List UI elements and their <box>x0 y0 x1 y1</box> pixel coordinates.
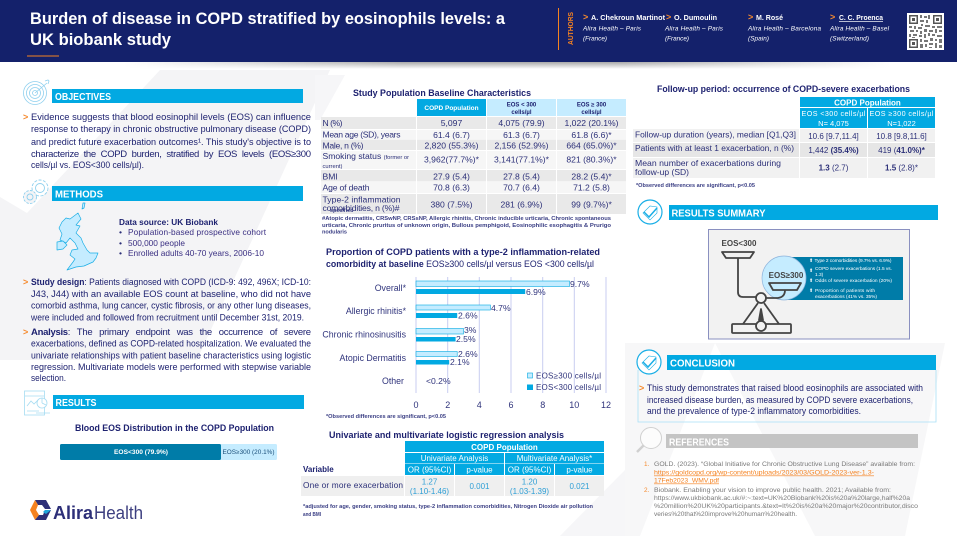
table: logistic regression: Variable <box>303 465 334 474</box>
author 3: (Spain) <box>748 36 769 42</box>
bar chart: type-2 comorbidity: 2.1% <box>450 357 470 367</box>
table: baseline characteristics <box>321 88 626 236</box>
author 4: C. C. Proenca <box>839 15 883 22</box>
table: follow-up exacerbations: 1.5 (2.8)* <box>885 164 918 172</box>
table: logistic regression: Multivariate Analysis* <box>517 454 592 463</box>
data source block: Population-based prospective cohort <box>128 227 267 237</box>
text block: references: 17Feb2023_WMV.pdf <box>654 478 719 484</box>
table: follow-up exacerbations: 419 (41.0%)* <box>878 146 926 155</box>
text block: study design: comorbid asthma, lung cancer, cystic fibrosis, or any other lung diseases, <box>31 300 311 312</box>
text block: analysis: regression. Multivariate models were performed with stepwise variable <box>31 362 311 373</box>
author 1 <box>582 12 666 42</box>
footnote: follow-up table: *Observed differences are significant, p<0.05 <box>636 183 755 189</box>
footnote: baseline table: urticaria, Chronic pruritus of unknown origin, Bullous pemphigoid, Eosinophilic esophagitis & Prurigo <box>322 223 612 229</box>
text block: study design: were included and followed from recruitment until December 31st, 2019. <box>30 312 304 324</box>
author 4 <box>829 12 890 42</box>
text block: study design <box>23 277 311 324</box>
heading: references <box>666 434 918 448</box>
table: baseline characteristics: Mean age (SD), years <box>322 130 400 140</box>
text block: conclusion: and the prevalence of type-2 inflammatory comorbidities. <box>647 406 861 416</box>
footnote: regression table: and BMI <box>303 512 321 518</box>
author 3: > <box>748 12 753 22</box>
results summary scale graphic: ⬆ <box>809 288 813 294</box>
heading: comorbidity chart <box>326 247 600 269</box>
footnote: baseline table <box>322 216 612 236</box>
icon: results summary check <box>638 200 662 224</box>
heading: comorbidity chart: comorbidity at baseline EOS≥300 cells/µl versus EOS <300 cells/µl <box>326 259 594 269</box>
footnote: baseline table: nodularis <box>322 230 347 236</box>
data source block: Enrolled adults 40-70 years, 2006-10 <box>128 248 264 258</box>
table: logistic regression: One or more exacerbation <box>303 480 403 490</box>
text block: objectives: characterize the COPD burden, stratified by EOS levels (EOS≥300 <box>31 149 311 160</box>
results summary scale graphic: ⬆ <box>809 278 813 284</box>
table: baseline characteristics: 664 (65.0%)* <box>566 140 617 150</box>
text block: objectives: Evidence suggests that blood eosinophil levels (EOS) can influence <box>31 112 311 123</box>
chart legend: EOS<300 cells/µl <box>536 383 601 392</box>
author 1: > <box>583 12 588 22</box>
QR code <box>907 13 944 50</box>
table: baseline characteristics: 380 (7.5%) <box>430 200 473 210</box>
bar chart: type-2 comorbidity: 0 <box>413 400 419 410</box>
logo: Alira Health: Alira <box>53 502 94 523</box>
data source block: • <box>119 227 122 237</box>
author 2: O. Dumoulin <box>674 15 717 22</box>
table: follow-up exacerbations: Patients with at least 1 exacerbation, n (%) <box>635 144 794 153</box>
text block: objectives: response to therapy in chronic obstructive pulmonary disease (COPD) <box>31 124 311 135</box>
bar chart: type-2 comorbidity: 3% <box>464 325 477 335</box>
author 1: Alira Health – Paris <box>582 26 642 32</box>
table: baseline characteristics: 70.8 (6.3) <box>433 182 470 192</box>
table: baseline characteristics: cells/µl <box>511 110 532 116</box>
author 1: A. Chekroun Martinot <box>591 15 666 22</box>
table: follow-up exacerbations: Follow-up duration (years), median [Q1,Q3] <box>635 130 796 140</box>
author 4: > <box>830 12 835 22</box>
heading: conclusion: CONCLUSION <box>670 358 735 370</box>
bar chart: type-2 comorbidity: 9.7% <box>570 279 590 289</box>
results summary scale graphic: exacerbations (41% vs. 35%) <box>815 294 877 300</box>
table: follow-up exacerbations: 1,442 (35.4%) <box>808 146 859 155</box>
table: baseline characteristics: 61.4 (6.7) <box>433 130 470 140</box>
table: follow-up exacerbations: 1.3 (2.7) <box>819 164 849 172</box>
table: baseline characteristics: 281 (6.9%) <box>500 200 543 210</box>
table: logistic regression: (1.10-1.46) <box>410 487 449 496</box>
bar chart: type-2 comorbidity: Overall* <box>375 283 407 293</box>
table: baseline characteristics: current) <box>322 164 343 170</box>
bar chart: type-2 comorbidity: 8 <box>540 400 545 410</box>
table: baseline characteristics: 4,075 (79.9) <box>498 118 545 128</box>
EOS distribution bar chart: EOS≥300 (20.1%) <box>222 449 274 456</box>
table: baseline characteristics: 2,156 (52.9%) <box>495 140 549 150</box>
results summary scale graphic: COPD severe exacerbations (1.5 vs. <box>815 266 892 272</box>
table: follow-up exacerbations <box>633 84 935 189</box>
chart legend <box>527 372 601 392</box>
bar chart: type-2 comorbidity: Allergic rhinitis* <box>346 306 407 316</box>
authors label: AUTHORS <box>566 12 575 45</box>
heading: results: RESULTS <box>56 397 96 409</box>
data source block: Data source: UK Biobank <box>119 217 218 227</box>
heading: objectives: OBJECTIVES <box>55 91 111 103</box>
text block: objectives: and predict future exacerbation outcomes¹. This study's objective is to <box>31 137 311 148</box>
icon: results report <box>24 391 50 415</box>
text block: analysis: selection. <box>31 373 66 384</box>
bar chart: type-2 comorbidity: 2.6% <box>458 310 478 320</box>
text block: references: veries%20that%20improve%20human%20health. <box>654 511 797 518</box>
table: baseline characteristics: 2,820 (55.3%) <box>425 140 479 150</box>
icon: conclusion check <box>637 350 661 374</box>
text block: conclusion: > <box>639 383 644 393</box>
table: baseline characteristics: Type-2 inflammation <box>322 194 401 204</box>
heading: methods: METHODS <box>55 188 103 200</box>
table: baseline characteristics: 3,962(77.7%)* <box>424 154 480 164</box>
author 2 <box>664 12 724 42</box>
author 2: Alira Health – Paris <box>664 26 724 32</box>
text block: conclusion: This study demonstrates that raised blood eosinophils are associated with <box>647 383 923 393</box>
table: baseline characteristics: 27.9 (5.4) <box>433 172 470 182</box>
bar chart: type-2 comorbidity: Other <box>382 376 404 386</box>
heading: comorbidity chart: Proportion of COPD patients with a type-2 inflammation-related <box>326 247 600 257</box>
bar chart: type-2 comorbidity: 2 <box>445 400 450 410</box>
table: follow-up exacerbations: follow-up (SD) <box>635 168 689 177</box>
author 3 <box>747 12 821 42</box>
text block: analysis: exacerbations, defined as COPD-related hospitalization. We evaluated the <box>31 338 311 350</box>
author 1: (France) <box>583 36 607 42</box>
table: baseline characteristics: 5,097 <box>441 118 462 128</box>
EOS distribution bar chart: EOS<300 (79.9%) <box>114 449 168 456</box>
table: baseline characteristics: Smoking status (former or <box>322 151 409 161</box>
table: baseline characteristics: cells/µl <box>581 110 602 116</box>
bar chart: type-2 comorbidity: Atopic Dermatitis <box>340 353 407 363</box>
text block: references: Biobank. Enabling your vision to improve public health. 2021; Available from: <box>654 487 891 494</box>
table: baseline characteristics: 70.7 (6.4) <box>503 182 540 192</box>
text block: references: https://goldcopd.org/wp-content/uploads/2023/03/GOLD-2023-ver-1.3- <box>654 470 874 476</box>
author 2: (France) <box>665 36 689 42</box>
table: logistic regression: 0.001 <box>469 482 490 491</box>
table: baseline characteristics: 1,022 (20.1%) <box>565 118 619 128</box>
bar chart: type-2 comorbidity: 6.9% <box>526 287 546 297</box>
bar chart: type-2 comorbidity: 4 <box>477 400 482 410</box>
text block: references: GOLD. (2023). “Global Initiative for Chronic Obstructive Lung Disease” available from: <box>654 461 915 468</box>
results summary scale graphic: Odds of severe exacerbation (20%) <box>815 278 892 284</box>
EOS distribution bar chart: Blood EOS Distribution in the COPD Population <box>75 423 274 433</box>
table: logistic regression: OR (95%CI) <box>508 466 552 474</box>
author 4: Alira Health – Basel <box>829 26 890 32</box>
text block: references <box>644 461 918 518</box>
table: follow-up exacerbations: 10.8 [9.8,11.6] <box>876 132 927 141</box>
table: logistic regression: OR (95%CI) <box>408 466 452 474</box>
bar chart: type-2 comorbidity: <0.2% <box>426 376 451 386</box>
text block: references: 1. <box>644 461 650 468</box>
bar chart: type-2 comorbidity: 6 <box>508 400 514 410</box>
results summary scale graphic: ⬆ <box>809 268 813 274</box>
icon: magnifier <box>637 428 662 452</box>
title <box>30 10 506 49</box>
table: logistic regression: 1.27 <box>422 478 438 486</box>
text block: study design: > <box>23 277 28 287</box>
text block: analysis <box>23 327 311 384</box>
results summary scale graphic: Type 2 comorbidities (9.7% vs. 6.9%) <box>814 258 892 264</box>
table: logistic regression: p-value <box>566 466 593 474</box>
table: baseline characteristics: COPD Population <box>424 105 479 112</box>
table: follow-up exacerbations: 10.6 [9.7,11.4] <box>808 132 859 141</box>
bar chart: type-2 comorbidity: 2.6% <box>458 349 478 359</box>
header banner <box>0 0 957 62</box>
heading: results summary <box>669 205 938 220</box>
data source block: 500,000 people <box>128 238 185 248</box>
icon: UK map <box>57 203 98 270</box>
table: logistic regression: COPD Population <box>471 443 538 452</box>
table: baseline characteristics: 3,141(77.1%)* <box>494 154 550 164</box>
table: baseline characteristics: 821 (80.3%)* <box>566 154 617 164</box>
table: baseline characteristics: EOS < 300 <box>507 102 537 108</box>
footnote: baseline table: #Atopic dermatitis, CRSwNP, CRSsNP, Allergic rhinitis, Chronic inducible urticaria, Chronic spontaneous <box>322 216 611 222</box>
text block: analysis: > <box>23 327 28 337</box>
text block: analysis: Analysis: The primary endpoint was the occurrence of severe <box>31 327 311 338</box>
table: baseline characteristics: EOS ≥ 300 <box>577 102 607 108</box>
table: baseline characteristics: 71.2 (5.8) <box>573 182 610 192</box>
title: UK biobank study <box>30 31 172 49</box>
data source block: • <box>119 238 122 248</box>
text block: references: https://www.ukbiobank.ac.uk/#:~:text=UK%20Biobank%20is%20a%20large,half%20a <box>654 495 910 502</box>
footnote: regression table: *adjusted for age, gender, smoking status, type-2 inflammation comorbidities, Nitrogen Dioxide air pollution <box>303 504 593 510</box>
icon: target <box>24 80 49 104</box>
heading: follow-up table: Follow-up period: occurrence of COPD-severe exacerbations <box>657 84 910 94</box>
heading: objectives <box>52 89 303 103</box>
table: baseline characteristics: 61.3 (6.7) <box>503 130 540 140</box>
icon: gears <box>24 180 48 204</box>
chart legend: EOS≥300 cells/µl <box>536 372 601 380</box>
table: baseline characteristics: 27.8 (5.4) <box>503 172 540 182</box>
text block: conclusion: increased disease burden, as measured by COPD severe exacerbations, <box>647 395 913 405</box>
table: follow-up exacerbations: EOS <300 cells/µl <box>802 109 866 118</box>
heading: methods <box>52 186 303 201</box>
logo: Alira Health <box>30 499 143 523</box>
text block: study design: J43, J44) with an available EOS count at baseline, who did not have <box>31 289 311 300</box>
text block: objectives: cells/µl vs. EOS<300 cells/µl). <box>31 160 144 171</box>
table: follow-up exacerbations: N= 4,075 <box>818 119 849 128</box>
heading: results <box>53 395 304 409</box>
logo: Alira Health: Health <box>94 502 143 523</box>
bar chart: type-2 comorbidity: 2.5% <box>456 334 476 344</box>
text block: references: 2. <box>644 487 650 494</box>
bar chart: type-2 comorbidity: Chronic rhinosinusitis <box>322 330 407 340</box>
footnote: chart: *Observed differences are significant, p<0.05 <box>326 414 446 420</box>
text block: analysis: univariate relationships with patient baseline characteristics using logistic <box>31 350 311 362</box>
results summary scale graphic: 1.3) <box>815 272 824 278</box>
footnote: regression table <box>303 504 593 518</box>
results summary scale graphic: ⬆ <box>809 258 813 264</box>
text block: references: %20million%20UK%20participants.&text=It%20is%20a%20major%20contributor,disco <box>654 503 918 510</box>
results summary scale graphic <box>708 230 910 339</box>
bar chart: type-2 comorbidity: 4.7% <box>491 303 511 313</box>
heading: results summary: RESULTS SUMMARY <box>672 208 766 220</box>
bar chart: type-2 comorbidity <box>322 247 611 420</box>
heading: regression table: Univariate and multivariate logistic regression analysis <box>329 430 564 440</box>
data source block <box>119 217 267 258</box>
table: follow-up exacerbations: Mean number of exacerbations during <box>635 159 781 168</box>
results summary scale graphic: EOS≥300 <box>769 271 804 280</box>
results summary scale graphic: Proportion of patients with <box>815 288 875 294</box>
table: baseline characteristics: 28.2 (5.4)* <box>571 172 612 182</box>
heading: conclusion <box>667 355 936 370</box>
table: logistic regression: 1.20 <box>522 478 538 486</box>
table: baseline characteristics: N (%) <box>322 118 343 128</box>
table: baseline characteristics: comorbidities, n (%)# <box>322 203 400 213</box>
table: baseline characteristics: Age of death <box>322 182 370 192</box>
table: follow-up exacerbations: COPD Population <box>834 98 901 108</box>
bar chart: type-2 comorbidity: 10 <box>569 400 579 410</box>
table: logistic regression: 0.021 <box>569 482 590 491</box>
heading: baseline table: Study Population Baseline Characteristics <box>353 88 531 98</box>
table: follow-up exacerbations: N=1,022 <box>887 119 916 128</box>
table: baseline characteristics: Male, n (%) <box>322 140 364 150</box>
text block: objectives: > <box>23 112 28 122</box>
panel: conclusion <box>638 355 936 422</box>
heading: references: REFERENCES <box>669 436 729 448</box>
title: Burden of disease in COPD stratified by eosinophils levels: a <box>30 10 506 28</box>
author 3: Alira Health – Barcelona <box>747 26 821 32</box>
data source block: • <box>119 248 122 258</box>
table: baseline characteristics: 61.8 (6.6)* <box>571 130 612 140</box>
table: logistic regression: (1.03-1.39) <box>510 487 549 496</box>
table: follow-up exacerbations: EOS ≥300 cells/µl <box>870 109 934 118</box>
table: baseline characteristics: BMI <box>322 172 338 182</box>
author 2: > <box>666 12 671 22</box>
table: logistic regression: p-value <box>466 466 493 474</box>
results summary scale graphic: EOS<300 <box>722 239 757 248</box>
text block: study design: Study design: Patients diagnosed with COPD (ICD-9: 492, 496X; ICD-10: <box>31 277 311 288</box>
text block: objectives <box>23 112 311 171</box>
bar chart: type-2 comorbidity: 12 <box>601 400 611 410</box>
EOS distribution bar chart <box>60 423 277 460</box>
text block: conclusion <box>639 383 923 416</box>
table: baseline characteristics: 99 (9.7%)* <box>571 200 612 210</box>
table: baseline characteristics: specified <box>330 208 353 214</box>
author 4: (Switzerland) <box>830 36 869 42</box>
table: logistic regression: Univariate Analysis <box>421 454 488 463</box>
table: logistic regression <box>301 430 604 518</box>
author 3: M. Rosé <box>756 15 783 22</box>
